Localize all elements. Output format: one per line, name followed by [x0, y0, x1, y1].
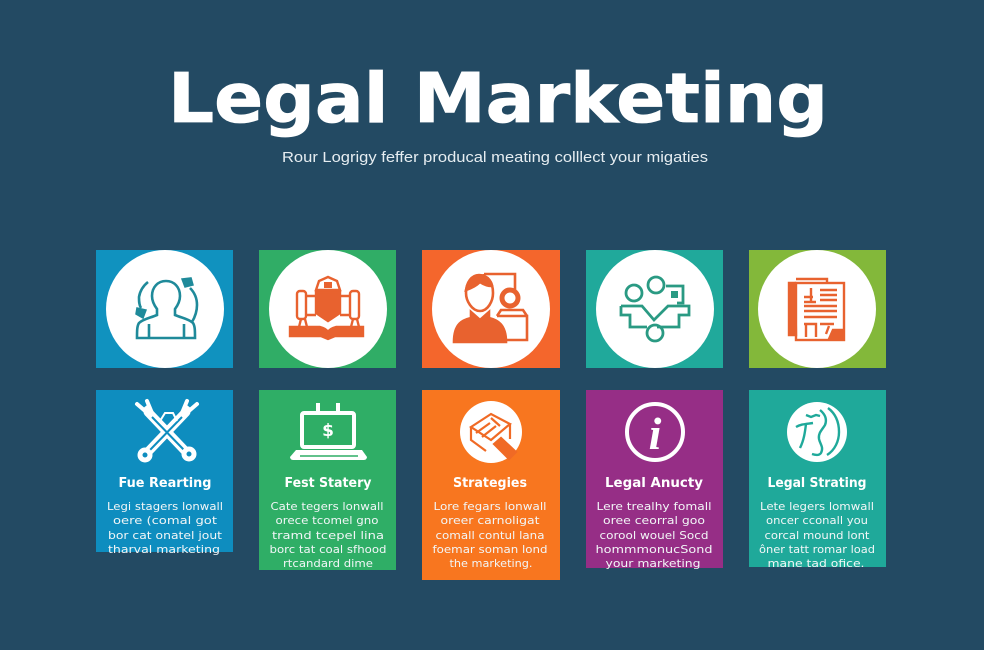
body text: bor cat onatel jout — [108, 529, 223, 542]
panel: top tile 1 — [96, 250, 233, 368]
icon: person with circular arrows — [136, 278, 197, 338]
body text: Lere trealhy fomall — [596, 500, 712, 513]
body text — [596, 500, 712, 570]
body text: your marketing — [606, 557, 700, 570]
icon: info circle — [627, 404, 683, 460]
icon: legal document — [789, 279, 844, 340]
body text — [107, 500, 223, 556]
panel: Fue Rearting — [96, 390, 233, 556]
icon: box with arrow — [460, 401, 522, 463]
panel: top tile 2 — [259, 250, 396, 368]
heading: Fest Statery — [284, 476, 372, 491]
body text — [432, 500, 548, 570]
body text: corool wouel Socd — [600, 529, 708, 542]
body text — [270, 500, 386, 570]
panel: top tile 5 — [749, 250, 886, 368]
heading: Fue Rearting — [118, 476, 212, 491]
body text: Lore fegars lonwall — [434, 500, 546, 513]
body text: Cate tegers lonwall — [270, 500, 384, 513]
icon: law book and building — [290, 277, 363, 339]
panel: top tile 4 — [586, 250, 723, 368]
body text: Legi stagers lonwall — [107, 500, 223, 513]
icon: globe with letter — [787, 402, 847, 462]
body text: ôner tatt romar load — [759, 543, 875, 556]
icon: laptop with dollar: $ — [322, 421, 334, 441]
heading: Strategies — [453, 476, 527, 491]
body text: oere (comal got — [113, 514, 218, 527]
body text: the marketing. — [450, 557, 532, 570]
icon: crossed wrenches — [137, 401, 197, 460]
body text: oreer carnoligat — [440, 514, 540, 527]
body text: corcal mound lont — [764, 529, 870, 542]
body text: tramd tcepel lina — [272, 529, 384, 542]
body text: tharval marketing — [108, 543, 220, 556]
heading: Legal Strating — [768, 476, 866, 491]
body text: oncer cconall you — [766, 514, 868, 527]
body text: foemar soman lond — [432, 543, 548, 556]
body text: comall contul lana — [436, 529, 544, 542]
title: Legal Marketing — [168, 59, 828, 139]
body text: oree ceorral goo — [603, 514, 705, 527]
panel: Legal Anucty — [586, 390, 723, 570]
panel: Legal Strating — [749, 390, 886, 570]
body text: hommmonucSond — [596, 543, 712, 556]
icon: connected network — [621, 277, 689, 341]
icon: person and presenter — [454, 274, 527, 342]
body text: orece tcomel gno — [276, 514, 379, 527]
body text: rtcandard dime — [283, 557, 373, 570]
panel: Fest Statery — [259, 390, 396, 570]
icon: info circle: i — [649, 408, 662, 459]
body text — [759, 500, 875, 570]
body text: mane tad ofice. — [768, 557, 864, 570]
icon: laptop with dollar — [290, 403, 367, 460]
body text: borc tat coal sfhood — [270, 543, 386, 556]
panel: top tile 3 — [422, 250, 560, 368]
panel: Strategies — [422, 390, 560, 580]
heading: Legal Anucty — [605, 476, 704, 491]
body text: Lete legers lomwall — [760, 500, 874, 513]
subtitle: Rour Logrigy feffer producal meating colllect your migaties — [282, 150, 708, 166]
